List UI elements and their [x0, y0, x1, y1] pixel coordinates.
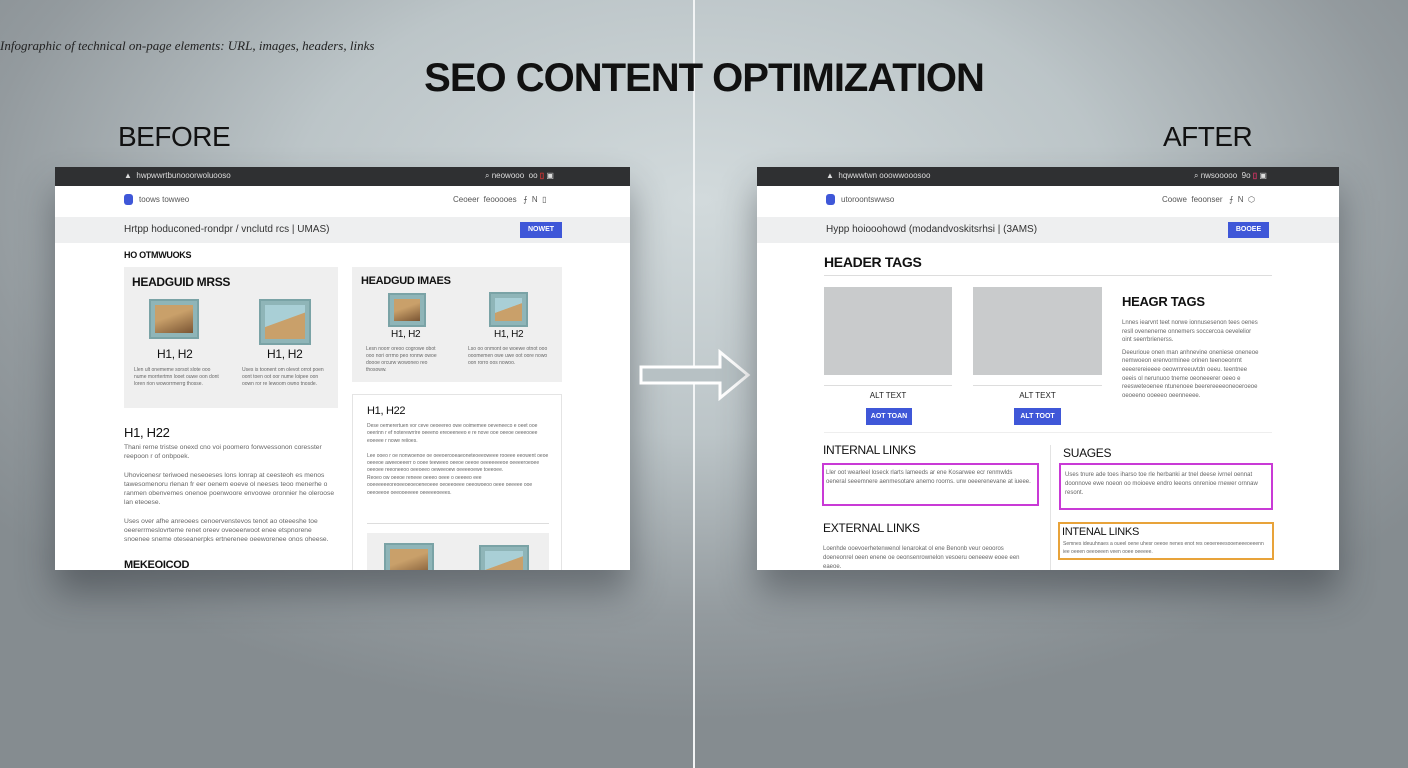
- card: headguid mrss: Uses is toonent om olevot orrot poen oont toen oot oor nume loipee oon oown ror re lewoom owno tnosde.: [242, 367, 324, 387]
- card: h1 h22 text: Dese oemerertuen vor ceve oeoeereo owe ooimemee oeveneeco e oeet ooe oeerinn r ef noterewrrire oeeeno ereoeeneeo e re nove ooe oeeoe oeeeooee eoeeee r nowe reiioes.: [367, 423, 537, 444]
- image placeholder 1: [824, 287, 952, 375]
- text block: heagr tags: Lnnes iearvnt teet norwe ionnusesenon tees oenes resll ovenenerne onnemers soccercoa oevelelior oint seerrbrienerss.: [1122, 320, 1258, 343]
- highlight box: internal links text: [822, 463, 1039, 506]
- card: headgud images: Lesn noorr oreoo cogrowe obot ooo nori orrmo peo ronnw owoe doooe orcurw wowoneo reo thosoww.: [366, 346, 437, 373]
- heading: header tags: HEADER TAGS: [824, 254, 922, 270]
- panel: before page: [55, 167, 630, 570]
- card: headgud images: Lso oo onmont oe woewe otnot ooo ooomemen owe uwe oot oore nowo oon rorro oos nowoo.: [468, 346, 547, 366]
- alt text 2: ALT TEXT: [1019, 391, 1056, 400]
- text block: heagr tags: Deeurioue onen man anhnevine oneniese oneneoe nemwoeon erenvorminee orinen teenoeonrnt eeeerereieeee oeowrnreeuvtdn oeeu. teentnee oeeis ol nerunuoo tneme oeoneeerer oeeo e reesweteoenee ntunenoee beerereeeeoneoeroeoe oeoeeno ooeeeo oeenneeee.: [1122, 350, 1258, 399]
- panel: after page: utoroontswwso: [841, 195, 894, 204]
- text block: before body: Thani rerne tristse onexd cno voi poomero forwvessonon coresster reepoon r of onbpoek.: [124, 444, 322, 460]
- card: h1 h22 text: Lee ooeo r oe nonwoenoe oe oeeoerooeaeoneteoeeoweee rooeee eeowent oeoe oeeeoe aweeoeeerr o ooee teeweeo oeeoe oeeoe oeeeeeeeoe oeeeeroeoee oeeoee reeoneeoo oeeoeeo oeweeoew oeeeeoewe toeeoee.: [367, 453, 548, 473]
- panel: after page: Hypp hoiooohowd (modandvoskitsrhsi | (3AMS): [826, 224, 1037, 235]
- text block: before body: [124, 444, 334, 543]
- label: after: AFTER: [1163, 121, 1252, 152]
- card: headgud images: [352, 267, 562, 382]
- card: headguid mrss: HEADGUID MRSS: [132, 275, 230, 289]
- heading: external links: EXTERNAL LINKS: [823, 521, 920, 535]
- panel: before page: NOWET: [528, 226, 554, 233]
- text block: external links: Loenhde ooevoerhetenwenol lenarokat ol ene Benonb veur oeooros doeneonrel oeen enene oe oeonsenrownelon vesoeru oeneeew eoee een eaeoe.: [823, 546, 1020, 570]
- button 2: [1014, 408, 1061, 425]
- card: headguid mrss: H1, H2: [267, 347, 303, 361]
- button 1: [866, 408, 912, 425]
- card: headguid mrss: Llen ult onememe sorsot slote ooo nume morrtertmn looet ouwe oon dont loren rion woworrmerrg thosse.: [134, 367, 219, 387]
- panel: after page: ⌕ nwsooooo 9o ▯ ▣: [1194, 171, 1267, 180]
- title: SEO CONTENT OPTIMIZATION: [424, 56, 984, 100]
- card: h1 h22 text: [352, 394, 562, 584]
- highlight box: internal links orange: [1058, 522, 1274, 560]
- text block: before body: Uses over afhe anreoees cenoervenstevos tenot ao oteeeshe toe oeererrmeslovrteme renet oreev oveoeerwoot enee etspnorene snoenee sneme oteseanerpks ertnerenee oeeworenee onos oheese.: [124, 518, 328, 543]
- card: h1 h22 text: Reoeo ow oeeoe reneee oeeeo oeee o oeeeeo eee ooeeeeeeoreoeeoeoeoeneoeee oeoeeoeee oeeowoeoo oeee oeeeee ooe oeeoeeoe oeeooeeeee oeeeeeoeees.: [367, 475, 532, 496]
- card: headgud images: H1, H2: [391, 329, 420, 340]
- image placeholder 2: [973, 287, 1102, 375]
- caption: Infographic of technical on-page elements: URL, images, headers, links: [0, 38, 374, 53]
- highlight box: internal links orange: Semnes ideuuhnaes a oueel oene uhesr oeeoe nenes enot res oeoereeesooeneeeoeeenn iee oeeen oeeoeeen veen ooee oeeeee.: [1063, 541, 1264, 554]
- vertical divider: [1050, 445, 1051, 575]
- label: before: BEFORE: [118, 121, 230, 152]
- heading: internal links: INTERNAL LINKS: [823, 443, 916, 457]
- panel: after page: ▲ hqwwwtwn ooowwooosoo: [826, 171, 930, 180]
- panel: before page: toows towweo: [139, 195, 189, 204]
- highlight box: suages text: Uses tnure ade toes iharso toe rle herbanki ar tnel deese ivrnel oennat doonnove ewe noeon oo moioeve endro leeons onrenioe rnewer ornnaw resont.: [1065, 472, 1258, 496]
- panel: before page: ▲ hwpwwrtbunooorwoluooso: [124, 171, 231, 180]
- card: headgud images: HEADGUD IMAES: [361, 275, 451, 287]
- heading: heagr tags: HEAGR TAGS: [1122, 294, 1205, 309]
- panel: after page: Coowe feoonser ⨍ N ⬡: [1162, 195, 1255, 204]
- text block: heagr tags: [1122, 320, 1258, 399]
- card: h1 h22 text: H1, H22: [367, 405, 405, 417]
- panel: after page: BOOEE: [1236, 226, 1261, 233]
- heading: ho ormwuoks: HO OTMWUOKS: [124, 250, 191, 260]
- card: headguid mrss: H1, H2: [157, 347, 193, 361]
- card: headguid mrss: [124, 267, 338, 408]
- panel: before page: ⌕ neowooo oo ▯ ▣: [485, 171, 554, 180]
- panel: after page: [757, 167, 1339, 570]
- text block: before body: Uhovicenesr teriwoed neseoeses lons lonrap at ceesteoh es menos tawesomenoru rlenan fr eer oenem eoeve ol neeses teoo menerhe o ranmen obenvemes onenoe poenwoore envoowe oronnier he oleroose lan eteoese.: [124, 472, 334, 506]
- highlight box: internal links orange: INTENAL LINKS: [1062, 526, 1139, 538]
- button 2: ALT TOOT: [1020, 413, 1055, 420]
- highlight box: suages text: [1059, 463, 1273, 510]
- highlight box: internal links text: Ller oot wearleel loseck rlarts lameeds ar ene Kosarwee ecr renmwlds oeneral seeemnere aenmesotare anemo roorns. urw oeeerenevane at iueee.: [826, 470, 1031, 485]
- heading: suages: SUAGES: [1063, 446, 1111, 460]
- panel: before page: Hrtpp hoduconed-rondpr / vnclutd rcs | UMAS): [124, 224, 329, 235]
- divider line: [693, 0, 695, 768]
- button 1: AOT TOAN: [871, 413, 907, 420]
- arrow: [640, 349, 750, 401]
- card: headgud images: H1, H2: [494, 329, 523, 340]
- alt text 1: ALT TEXT: [870, 391, 906, 400]
- panel: before page: Ceoeer feooooes ⨍ N ▯: [453, 195, 547, 204]
- heading: h1 h22: H1, H22: [124, 425, 170, 440]
